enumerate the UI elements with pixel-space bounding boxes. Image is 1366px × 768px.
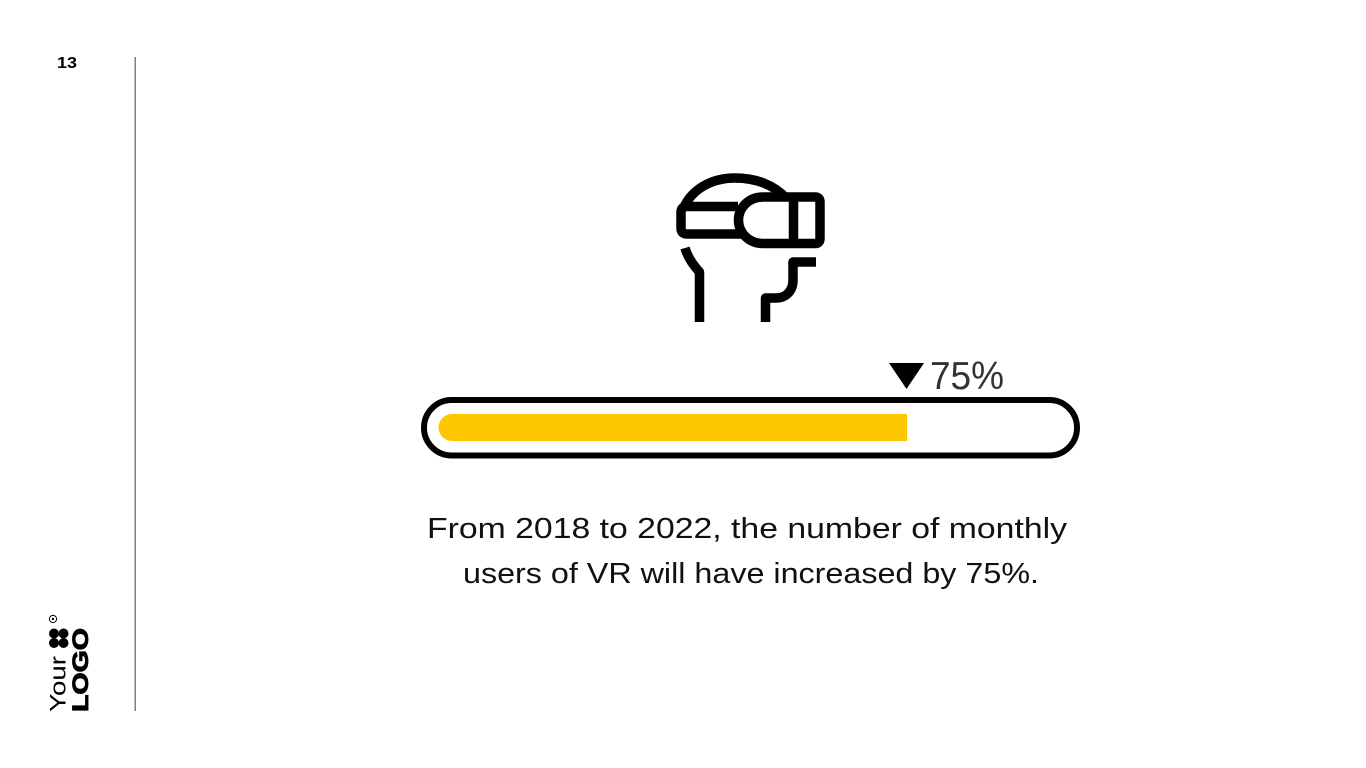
logo clover mark: [49, 628, 68, 648]
neck back: [685, 248, 700, 322]
icon: VR headset on head: [681, 178, 820, 322]
logo text: LOGO: LOGO: [68, 628, 93, 712]
value 75%: 75%: [930, 355, 1004, 398]
headset dome strap: [684, 178, 786, 207]
description text: [427, 513, 1068, 590]
line 1: From 2018 to 2022, the number of monthly: [427, 513, 1068, 545]
down triangle: [889, 363, 924, 389]
line 2: users of VR will have increased by 75%.: [463, 558, 1039, 590]
page number: 13: [57, 55, 77, 72]
registered mark: [49, 615, 57, 623]
bar track: [424, 400, 1077, 456]
visor divider: [789, 197, 798, 243]
face and chin: [766, 262, 816, 322]
progress bar: [424, 400, 1077, 456]
bar fill: [439, 414, 907, 441]
side strap: [681, 206, 741, 234]
vertical divider: [134, 57, 136, 711]
visor: [738, 197, 820, 244]
logo text: Your: Your: [46, 656, 70, 712]
logo: [46, 615, 93, 712]
percentage marker: [889, 355, 1004, 398]
